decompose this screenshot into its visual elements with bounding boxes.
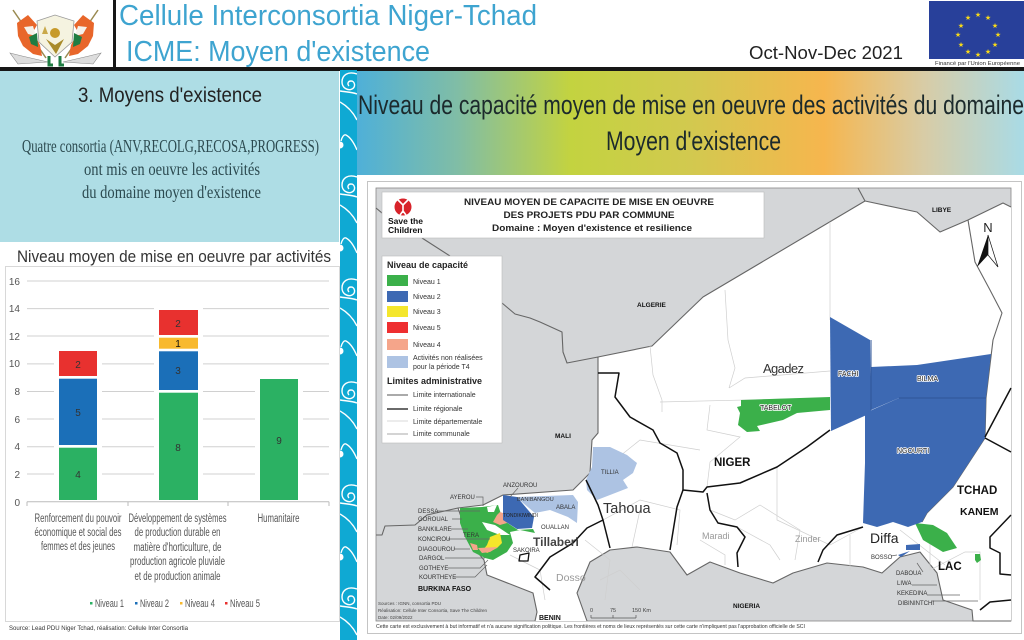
text block: consortia: ont mis en oeuvre les activités	[84, 159, 260, 179]
map labels: BILMA	[917, 376, 938, 383]
scale bar	[590, 608, 651, 618]
date: Oct-Nov-Dec 2021	[749, 43, 903, 63]
category labels: Développement de systèmes	[128, 513, 227, 525]
map labels: DARGOL	[419, 556, 445, 562]
chart heading: Niveau moyen de mise en oeuvre par activités	[17, 247, 331, 266]
map shapes: niveau 2 communes	[503, 317, 991, 557]
y axis labels: 16	[9, 277, 20, 288]
gridline gaps around bars	[54, 308, 303, 500]
bar value labels: 9	[276, 436, 282, 447]
map disclaimer: Cette carte est exclusivement à but informatif et n'a aucune signification politique. Les frontières et noms de lieux représentés sur cette carte n'impliquent pas l'approbation officielle de SCI	[376, 624, 805, 630]
map labels: SAKOIRA	[513, 548, 540, 554]
map labels: Maradi	[702, 531, 730, 541]
title: Cellule Interconsortia Niger-Tchad	[119, 0, 537, 32]
map legend	[382, 256, 502, 443]
map legend: Limite départementale	[413, 419, 482, 426]
category labels	[34, 513, 300, 583]
scale bar: 75	[610, 608, 616, 614]
logo: European Union flag: ★	[965, 14, 971, 22]
category labels: et de production animale	[134, 571, 220, 583]
map legend: Niveau 3	[413, 309, 441, 316]
map labels	[418, 207, 999, 622]
bar value labels: 8	[175, 443, 181, 454]
title: ICME: Moyen d'existence	[126, 36, 430, 68]
map labels: GOROUAL	[418, 517, 449, 523]
map legend: Limite internationale	[413, 392, 476, 399]
map legend: Niveau 2	[413, 294, 441, 301]
logo: European Union flag	[929, 1, 1024, 67]
map legend: Limite régionale	[413, 406, 463, 413]
map shapes: niveau 1 communes	[460, 397, 981, 563]
map labels: DABOUA	[896, 571, 921, 577]
panel: introduction	[0, 71, 339, 242]
text block: consortia	[22, 136, 319, 202]
map labels: GOTHEYE	[419, 566, 448, 572]
department boundaries	[510, 222, 980, 600]
north arrow: N	[983, 220, 993, 235]
panel: stacked bar chart	[6, 266, 340, 622]
category labels: de production durable en	[134, 527, 220, 539]
logo: European Union flag: ★	[975, 11, 981, 19]
map labels: FACHI	[838, 371, 859, 378]
international borders	[376, 188, 1011, 621]
logo: European Union flag: ★	[985, 48, 991, 56]
y axis labels: 8	[14, 387, 20, 398]
map sources: Date: 02/09/2022	[378, 615, 413, 620]
map labels: NIGER	[714, 457, 751, 469]
map labels: Tillaberi	[533, 535, 579, 549]
map labels: Dosso	[556, 572, 586, 584]
text block: consortia: Quatre consortia (ANV,RECOLG,RECOSA,PROGRESS)	[22, 136, 319, 157]
bar: developpement	[159, 310, 198, 500]
map labels: NGOURTI	[897, 448, 929, 455]
header divider bars	[0, 0, 1024, 71]
bar value labels	[75, 319, 282, 481]
map shapes: holes and niveau 4 and 3	[470, 505, 510, 553]
category labels: production agricole pluviale	[130, 556, 225, 568]
category labels: Humanitaire	[258, 513, 300, 525]
map legend: Activités non réalisées	[413, 355, 483, 362]
map title text: Domaine : Moyen d'existence et resilience	[492, 223, 692, 234]
map title text	[464, 197, 714, 234]
category labels: matière d'horticulture, de	[134, 542, 222, 554]
map labels: BENIN	[539, 615, 561, 622]
chart source: Source: Lead PDU Niger Tchad, réalisation: Cellule Inter Consortia	[9, 626, 189, 632]
category labels: économique et social des	[34, 527, 122, 539]
map labels: LAC	[938, 561, 962, 573]
chart legend: Niveau 2	[140, 598, 169, 610]
panel: map	[368, 182, 1022, 634]
logo: European Union flag: ★	[992, 22, 998, 30]
map labels: KONCIROU	[418, 537, 450, 543]
text block: consortia: du domaine moyen d'existence	[82, 182, 261, 202]
logo: European Union flag: ★	[975, 51, 981, 59]
logo: European Union flag: ★	[958, 22, 964, 30]
chart legend: Niveau 5	[230, 598, 260, 610]
logo: coat of arms of Niger	[10, 10, 101, 65]
panel: gradient heading	[357, 71, 1024, 175]
chart legend: Niveau 1	[95, 598, 124, 610]
map legend: Niveau 5	[413, 325, 441, 332]
bar value labels: 5	[75, 408, 81, 419]
map labels: TILLIA	[601, 470, 619, 476]
map sources: Réalisation: Cellule Inter Consortia, Save The Children	[378, 608, 487, 613]
title	[119, 0, 537, 68]
map labels: Zinder	[795, 534, 821, 544]
map labels: OUALLAN	[541, 525, 569, 531]
north arrow	[977, 220, 998, 267]
logo: European Union flag: ★	[995, 31, 1001, 39]
bar value labels: 3	[175, 366, 181, 377]
map labels: BOSSO	[871, 555, 893, 561]
bar value labels: 2	[75, 360, 81, 371]
y axis labels: 12	[9, 332, 20, 343]
logo: European Union flag: ★	[955, 31, 961, 39]
map labels: Agadez	[763, 361, 804, 376]
decorative strip	[340, 70, 357, 640]
panel: gradient heading: Moyen d'existence	[606, 126, 781, 156]
map labels: KEKEDINA	[897, 591, 927, 597]
map labels: NIGERIA	[733, 603, 760, 610]
map title text: DES PROJETS PDU PAR COMMUNE	[504, 210, 674, 221]
category labels: femmes et des jeunes	[41, 541, 115, 553]
map legend: Limites administrative	[387, 376, 482, 386]
map shapes: non realisees	[517, 447, 637, 523]
map sources	[378, 601, 487, 620]
map legend: Limite communale	[413, 431, 470, 438]
map labels: KANEM	[960, 506, 999, 518]
logo: European Union flag: ★	[985, 14, 991, 22]
logo: save the children: Children	[388, 225, 422, 235]
chart legend	[90, 598, 260, 610]
y axis labels: 2	[14, 470, 20, 481]
map legend: pour la période T4	[413, 364, 470, 371]
logo: European Union flag: ★	[992, 41, 998, 49]
map sources: Sources : IGNN, consortia PDU	[378, 601, 441, 606]
map labels: TABELOT	[760, 405, 792, 412]
map labels: BANKILARE	[418, 527, 452, 533]
map labels: DIAGOUROU	[418, 547, 455, 553]
map labels: LIWA	[897, 581, 911, 587]
logo: save the children	[388, 198, 423, 235]
bar value labels: 2	[175, 319, 181, 330]
map labels: TONDIKIWINDI	[503, 513, 538, 519]
map labels: Diffa	[870, 530, 899, 546]
map labels: ALGERIE	[637, 302, 667, 309]
map labels: Tahoua	[603, 501, 652, 517]
scale bar: 0	[590, 608, 593, 614]
logo: European Union flag: ★	[965, 48, 971, 56]
map land: Niger and Tchad	[458, 201, 1011, 621]
chart legend: Niveau 4	[185, 598, 215, 610]
map labels: DESSA	[418, 509, 438, 515]
map labels: ABALA	[556, 505, 575, 511]
logo: European Union flag: ★	[958, 41, 964, 49]
map labels: BANIBANGOU	[517, 497, 554, 503]
y axis labels	[9, 277, 20, 509]
category labels: Renforcement du pouvoir	[34, 513, 122, 525]
y axis labels: 0	[14, 498, 20, 509]
scale bar: 150 Km	[632, 608, 651, 614]
map title text: NIVEAU MOYEN DE CAPACITE DE MISE EN OEUVRE	[464, 197, 714, 208]
gridlines and axis	[27, 281, 329, 506]
logo: European Union flag: Financé par l'Union Européenne	[935, 61, 1020, 67]
map labels: LIBYE	[932, 207, 952, 214]
y axis labels: 14	[9, 304, 20, 315]
map labels: TCHAD	[957, 485, 997, 497]
bar value labels: 1	[175, 339, 181, 350]
leader lines	[437, 488, 978, 601]
bar value labels: 4	[75, 470, 81, 481]
logo: save the children: Save the	[388, 216, 423, 226]
bar: humanitaire	[260, 379, 298, 500]
map labels: ANZOUROU	[503, 483, 537, 489]
map labels: BURKINA FASO	[418, 586, 472, 593]
heading: moyens d'existence: 3. Moyens d'existence	[78, 84, 262, 107]
bar: renforcement	[59, 351, 97, 500]
map labels: DIBININTCHI	[898, 601, 934, 607]
map labels: MALI	[555, 433, 571, 440]
y axis labels: 4	[14, 442, 20, 453]
title box	[382, 192, 764, 238]
map labels: TERA	[463, 533, 479, 539]
regional boundaries	[519, 373, 1011, 610]
map labels: AYEROU	[450, 495, 475, 501]
map legend: Niveau 4	[413, 342, 441, 349]
y axis labels: 10	[9, 359, 20, 370]
map labels: KOURTHEYE	[419, 575, 456, 581]
map legend: Niveau 1	[413, 279, 441, 286]
map legend: Niveau de capacité	[387, 260, 468, 270]
y axis labels: 6	[14, 415, 20, 426]
